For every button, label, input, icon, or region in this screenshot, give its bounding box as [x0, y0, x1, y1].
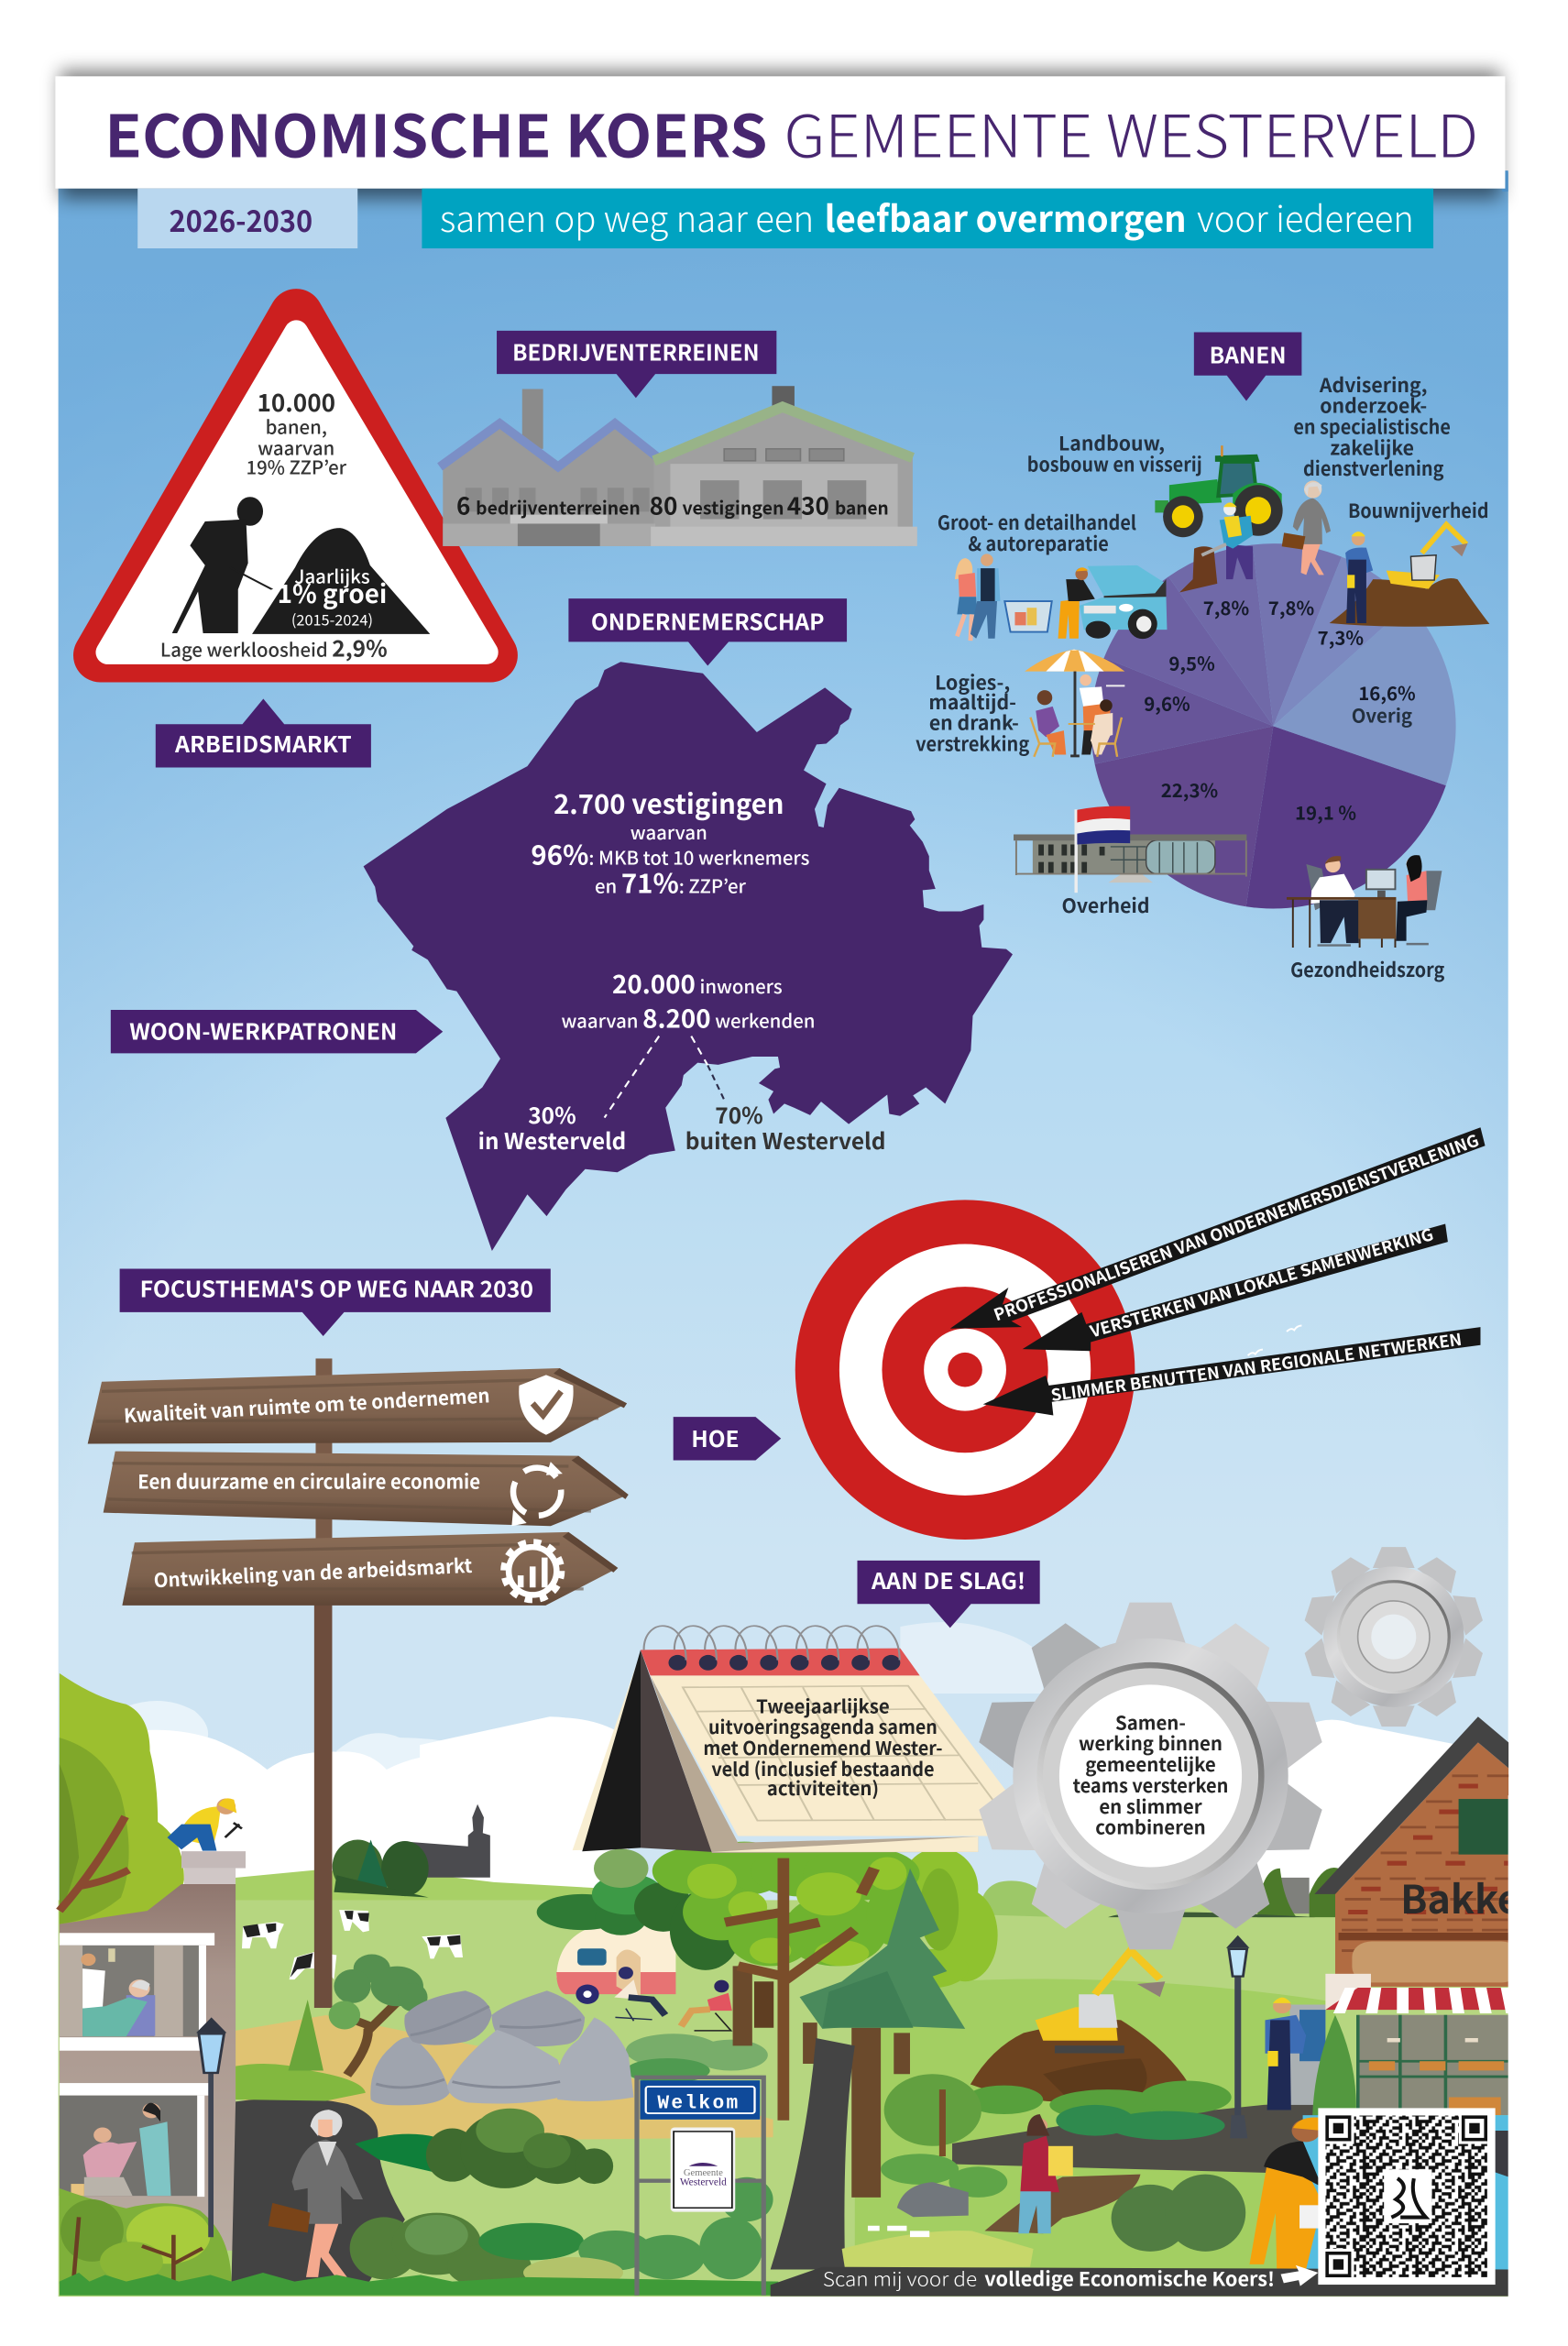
dark road and businesswoman — [232, 2098, 405, 2284]
labels: sector names — [916, 370, 1488, 983]
calendar: uitvoeringsagenda samen — [708, 1712, 938, 1739]
icon: earth mound — [252, 528, 430, 634]
labels: sector names: zakelijke — [1330, 433, 1414, 461]
label: banen: BANEN — [1210, 339, 1287, 371]
labels: sector names: bosbouw en visserij — [1027, 449, 1202, 477]
pie chart: banen: 7,8% — [1203, 593, 1249, 620]
map: gemeente Westerveld: in Westerveld — [478, 1124, 626, 1157]
road right and mound — [842, 1935, 1325, 2269]
icon: tractor — [1155, 445, 1283, 537]
label: arbeidsmarkt — [156, 698, 371, 768]
title light: GEMEENTE WESTERVELD — [784, 90, 1478, 174]
labels: sector names: Landbouw, — [1058, 428, 1165, 456]
welcome sign: Westerveld — [680, 2176, 727, 2187]
cover beyond panel edge — [1508, 1795, 1568, 2304]
icon: circular arrows — [511, 1462, 563, 1526]
map: gemeente Westerveld: waarvan — [630, 817, 707, 845]
label: woon-werkpatronen: WOON-WERKPATRONEN — [129, 1015, 397, 1047]
map: gemeente Westerveld: waarvan 8.200 werkenden — [562, 999, 816, 1036]
worker on roof — [167, 1798, 242, 1851]
pie chart: banen: 9,5% — [1168, 648, 1215, 675]
signpost pole lower — [314, 1541, 332, 2008]
pie chart: banen — [1091, 543, 1456, 908]
labels: sector names: maaltijd- — [928, 687, 1016, 716]
icon: doctor and patient — [1287, 855, 1442, 948]
label: ondernemerschap: ONDERNEMERSCHAP — [591, 605, 825, 637]
building with care scenes — [60, 1798, 246, 2290]
cows — [242, 1910, 463, 1979]
icon: terrace — [1025, 650, 1124, 757]
bakery — [1303, 1716, 1521, 2290]
calendar: activiteiten) — [767, 1773, 879, 1801]
labels: sector names: en specialistische — [1293, 411, 1451, 440]
sign: arbeidsmarkt — [122, 1532, 618, 1606]
factory illustration: 80 — [650, 488, 677, 522]
excavator — [1036, 1951, 1165, 2049]
street lamp left — [196, 2017, 226, 2237]
icon: earth pile — [1330, 578, 1489, 627]
map: gemeente Westerveld: 30% — [528, 1099, 576, 1131]
far trees right — [978, 1868, 1339, 1917]
landscape scene — [59, 1541, 1521, 2297]
small gear — [1302, 1547, 1486, 1727]
sand path — [236, 2015, 773, 2142]
label: bedrijventerreinen: BEDRIJVENTERREINEN — [512, 335, 760, 367]
sign: arbeidsmarkt: Ontwikkeling van de arbeidsmarkt — [153, 1551, 473, 1594]
street lamp — [1226, 1935, 1249, 2138]
label: focusthema's — [120, 1268, 551, 1336]
pie chart: banen: 7,3% — [1318, 623, 1364, 651]
subtitle bar: leefbaar overmorgen — [825, 192, 1187, 243]
labels: sector names: Bouwnijverheid — [1348, 496, 1488, 524]
church and tree group — [333, 1804, 490, 1898]
arrow: regionale netwerken: SLIMMER BENUTTEN VAN REGIONALE NETWERKEN — [1049, 1327, 1464, 1407]
calendar: met Ondernemend Wester- — [703, 1733, 943, 1760]
label: banen — [1194, 332, 1301, 401]
large gear: teams versterken — [1073, 1770, 1228, 1798]
period label — [137, 189, 357, 248]
bakery name: Bakke — [1400, 1869, 1520, 1925]
welcome sign — [637, 2077, 763, 2296]
factory illustration: 6 — [456, 488, 470, 522]
pie chart: banen: 9,6% — [1144, 689, 1190, 717]
calendar: veld (inclusief bestaande — [711, 1754, 935, 1781]
icon: forester — [1179, 502, 1253, 592]
calendar: Tweejaarlijkse — [756, 1691, 890, 1718]
warning triangle: arbeidsmarkt: 1% groei — [278, 574, 387, 610]
pie chart: banen: Overig — [1352, 701, 1412, 729]
birds — [1248, 1326, 1301, 1355]
warning triangle: arbeidsmarkt: Lage werkloosheid 2,9% — [160, 632, 388, 664]
bonsai tree — [329, 1955, 428, 2075]
warning triangle: arbeidsmarkt: (2015-2024) — [291, 608, 373, 630]
icon: construction worker — [1345, 532, 1373, 623]
arrow: lokale samenwerking: VERSTERKEN VAN LOKALE SAMENWERKING — [1086, 1222, 1436, 1343]
map: gemeente Westerveld: 2.700 vestigingen — [554, 784, 784, 822]
warning triangle: arbeidsmarkt: Jaarlijks — [294, 562, 370, 589]
period label: 2026-2030 — [169, 198, 313, 241]
icon: gear with chart — [504, 1542, 561, 1599]
calendar — [573, 1626, 1040, 1853]
pie chart: banen: 19,1 % — [1295, 798, 1356, 826]
clouds — [60, 1701, 631, 1902]
large gear: gemeentelijke — [1085, 1749, 1216, 1777]
subtitle bar: samen op weg naar een — [440, 192, 814, 243]
labels: sector names: verstrekking — [916, 729, 1030, 758]
sign: duurzame economie: Een duurzame en circulaire economie — [137, 1466, 480, 1495]
map: gemeente Westerveld: 20.000 inwoners — [612, 964, 783, 1001]
scan caption: volledige Economische Koers! — [984, 2264, 1275, 2293]
welcome sign: Welkom — [657, 2092, 740, 2114]
bushes center — [965, 2081, 1232, 2121]
caravan and campers — [556, 1924, 732, 2031]
sector illustrations — [955, 445, 1489, 948]
target — [795, 1200, 1135, 1540]
businesswoman — [269, 2110, 363, 2278]
labels: sector names: & autoreparatie — [968, 529, 1109, 557]
signpost — [88, 1358, 629, 1606]
welcome sign: Gemeente — [684, 2168, 723, 2178]
worker at terminal — [1265, 1998, 1325, 2110]
map: gemeente Westerveld: en 71%: ZZP’er — [595, 863, 747, 902]
title: ECONOMISCHE KOERS — [104, 90, 768, 174]
pie chart: banen: 22,3% — [1161, 775, 1218, 803]
icon: businesswoman — [1282, 480, 1331, 575]
large gear: Samen- — [1115, 1707, 1186, 1735]
label: woon-werkpatronen — [111, 1010, 443, 1053]
large gear: en slimmer — [1099, 1792, 1202, 1819]
pie chart: banen: 7,8% — [1268, 593, 1314, 620]
warning triangle: arbeidsmarkt: 19% ZZP’er — [247, 453, 347, 480]
subtitle bar — [422, 189, 1433, 248]
labels: sector names: dienstverlening — [1303, 454, 1444, 482]
icon: car — [1080, 565, 1167, 639]
factory illustration — [440, 386, 917, 546]
factory illustration: vestigingen — [682, 494, 784, 521]
warning triangle: arbeidsmarkt: banen, — [266, 411, 327, 439]
warning triangle: arbeidsmarkt: 10.000 — [258, 384, 335, 419]
labels: sector names: Advisering, — [1319, 370, 1428, 399]
sign: kwaliteit van ruimte: Kwaliteit van ruimte om te ondernemen — [123, 1380, 490, 1430]
sign: kwaliteit van ruimte — [88, 1368, 627, 1444]
map: gemeente Westerveld: 96%: MKB tot 10 werknemers — [531, 835, 810, 873]
rocks: hunebed — [370, 1990, 634, 2105]
icon: shield — [519, 1375, 574, 1435]
label: aan de slag — [857, 1561, 1040, 1628]
map: gemeente Westerveld: buiten Westerveld — [685, 1124, 886, 1157]
labels: sector names: Gezondheidszorg — [1290, 955, 1445, 983]
bushes — [60, 2188, 232, 2290]
icon: government building — [1014, 806, 1246, 893]
arrow: ondernemersdienstverlening: PROFESSIONALISEREN VAN ONDERNEMERSDIENSTVERLENING — [990, 1128, 1482, 1326]
label: hoe: HOE — [691, 1422, 740, 1454]
label: bedrijventerreinen — [497, 331, 776, 398]
large gear — [974, 1603, 1327, 1949]
care scene upper — [81, 1948, 155, 2036]
warning triangle: arbeidsmarkt: waarvan — [258, 433, 334, 460]
labels: sector names: onderzoek- — [1320, 391, 1427, 420]
large gear: werking binnen — [1079, 1728, 1223, 1756]
map: gemeente Westerveld — [364, 662, 1013, 1251]
icon: arrow to QR — [1281, 2265, 1318, 2286]
forest trees — [537, 1842, 998, 2269]
label: hoe — [674, 1417, 781, 1460]
person orange mechanic bottom — [1249, 2117, 1322, 2269]
clouds right — [420, 1622, 1510, 1910]
header bar — [55, 71, 1508, 199]
icon: car mechanic — [1058, 567, 1095, 639]
distant hill — [235, 1870, 629, 1900]
bottom band — [771, 2267, 1508, 2297]
sign: duurzame economie — [104, 1452, 629, 1526]
label: arbeidsmarkt: ARBEIDSMARKT — [174, 728, 352, 760]
factory illustration: bedrijventerreinen — [476, 494, 641, 521]
label: focusthema's: FOCUSTHEMA'S OP WEG NAAR 2030 — [140, 1273, 533, 1305]
QR code — [1318, 2108, 1496, 2285]
labels: sector names: Overheid — [1062, 891, 1150, 919]
warning triangle: arbeidsmarkt — [100, 316, 491, 664]
care scene lower — [71, 2103, 171, 2196]
woman with bag — [1018, 2114, 1073, 2233]
factory illustration: banen — [835, 494, 889, 521]
factory illustration: 430 — [787, 488, 829, 522]
pie chart: banen: 16,6% — [1358, 678, 1416, 706]
scan caption — [823, 2264, 1318, 2293]
label: ondernemerschap — [568, 598, 847, 666]
icon: excavator — [1387, 524, 1468, 589]
large gear: combineren — [1095, 1813, 1206, 1840]
map: gemeente Westerveld: 70% — [715, 1099, 763, 1131]
left tree — [60, 1673, 184, 1935]
label: aan de slag: AAN DE SLAG! — [871, 1564, 1025, 1596]
icon: road worker — [172, 497, 272, 633]
labels: sector names: Groot- en detailhandel — [938, 508, 1136, 536]
icon: shoppers — [955, 554, 1052, 641]
green bushes left-center — [60, 2000, 778, 2296]
meadow — [59, 1900, 1508, 2297]
bright field right — [855, 1979, 1335, 2269]
scan caption: Scan mij voor de — [823, 2264, 977, 2292]
labels: sector names: en drank- — [929, 708, 1019, 737]
subtitle bar: voor iedereen — [1197, 192, 1414, 243]
labels: sector names: Logies-, — [935, 668, 1010, 696]
